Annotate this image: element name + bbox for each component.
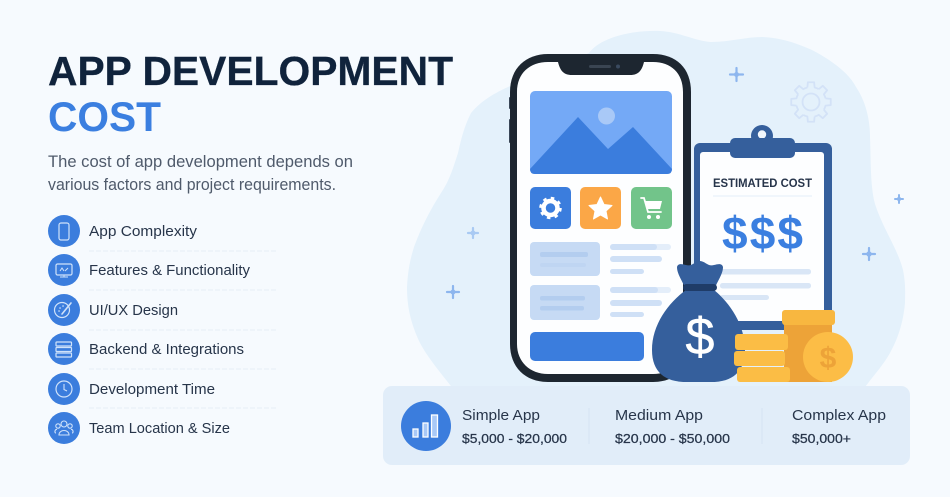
item: ui/ux (48, 294, 178, 326)
item: backend (48, 333, 244, 365)
tier: simple: Simple App (462, 407, 540, 424)
item: features (48, 254, 251, 286)
title: COST (48, 93, 161, 140)
phone button (530, 332, 644, 361)
tier: complex (792, 407, 886, 446)
dollar signs: $$$ (722, 207, 803, 259)
tier: medium (615, 407, 730, 446)
subtitle (48, 153, 353, 194)
gear outline (791, 82, 831, 122)
subtitle: The cost of app development depends on (48, 153, 353, 171)
item: team (48, 412, 230, 444)
coins: $ (820, 342, 837, 375)
tier: complex: $50,000+ (792, 431, 851, 446)
title (48, 48, 453, 140)
chart icon (401, 401, 451, 451)
clipboard lines (720, 269, 811, 300)
item: backend: Backend & Integrations (89, 342, 244, 358)
background blob (407, 31, 905, 390)
tier: medium: Medium App (615, 407, 703, 424)
item: app complexity: App Complexity (89, 224, 198, 240)
decorative plus: right upper (895, 195, 903, 203)
item: features: Features & Functionality (89, 263, 251, 279)
decorative plus: left lower (447, 286, 459, 298)
content card 2 (530, 285, 671, 320)
bag dollar: $ (686, 308, 715, 366)
item: ui/ux: UI/UX Design (89, 303, 178, 319)
app tile: cart (631, 187, 672, 229)
subtitle: various factors and project requirements. (48, 176, 336, 194)
decorative plus: right lower (863, 248, 875, 260)
tier: medium: $20,000 - $50,000 (615, 431, 730, 446)
clipboard (694, 125, 832, 330)
app tile: settings (530, 187, 571, 229)
clipboard heading: ESTIMATED COST (713, 178, 812, 190)
app tile: star (580, 187, 621, 229)
item: team: Team Location & Size (89, 421, 230, 437)
tier: simple: $5,000 - $20,000 (462, 431, 567, 446)
title: APP DEVELOPMENT (48, 48, 453, 94)
content card 1 (530, 242, 671, 276)
decorative plus: top (730, 68, 743, 81)
phone (509, 54, 691, 382)
coins (734, 310, 853, 382)
price panel (383, 386, 910, 465)
tier: simple (462, 407, 567, 446)
tier: complex: Complex App (792, 407, 886, 424)
item: development time: Development Time (89, 382, 215, 398)
factor list (48, 215, 278, 444)
hero image (530, 91, 672, 174)
item: app complexity (48, 215, 198, 247)
item: development time (48, 373, 215, 405)
decorative plus: left upper (468, 228, 478, 238)
money bag (652, 261, 745, 382)
